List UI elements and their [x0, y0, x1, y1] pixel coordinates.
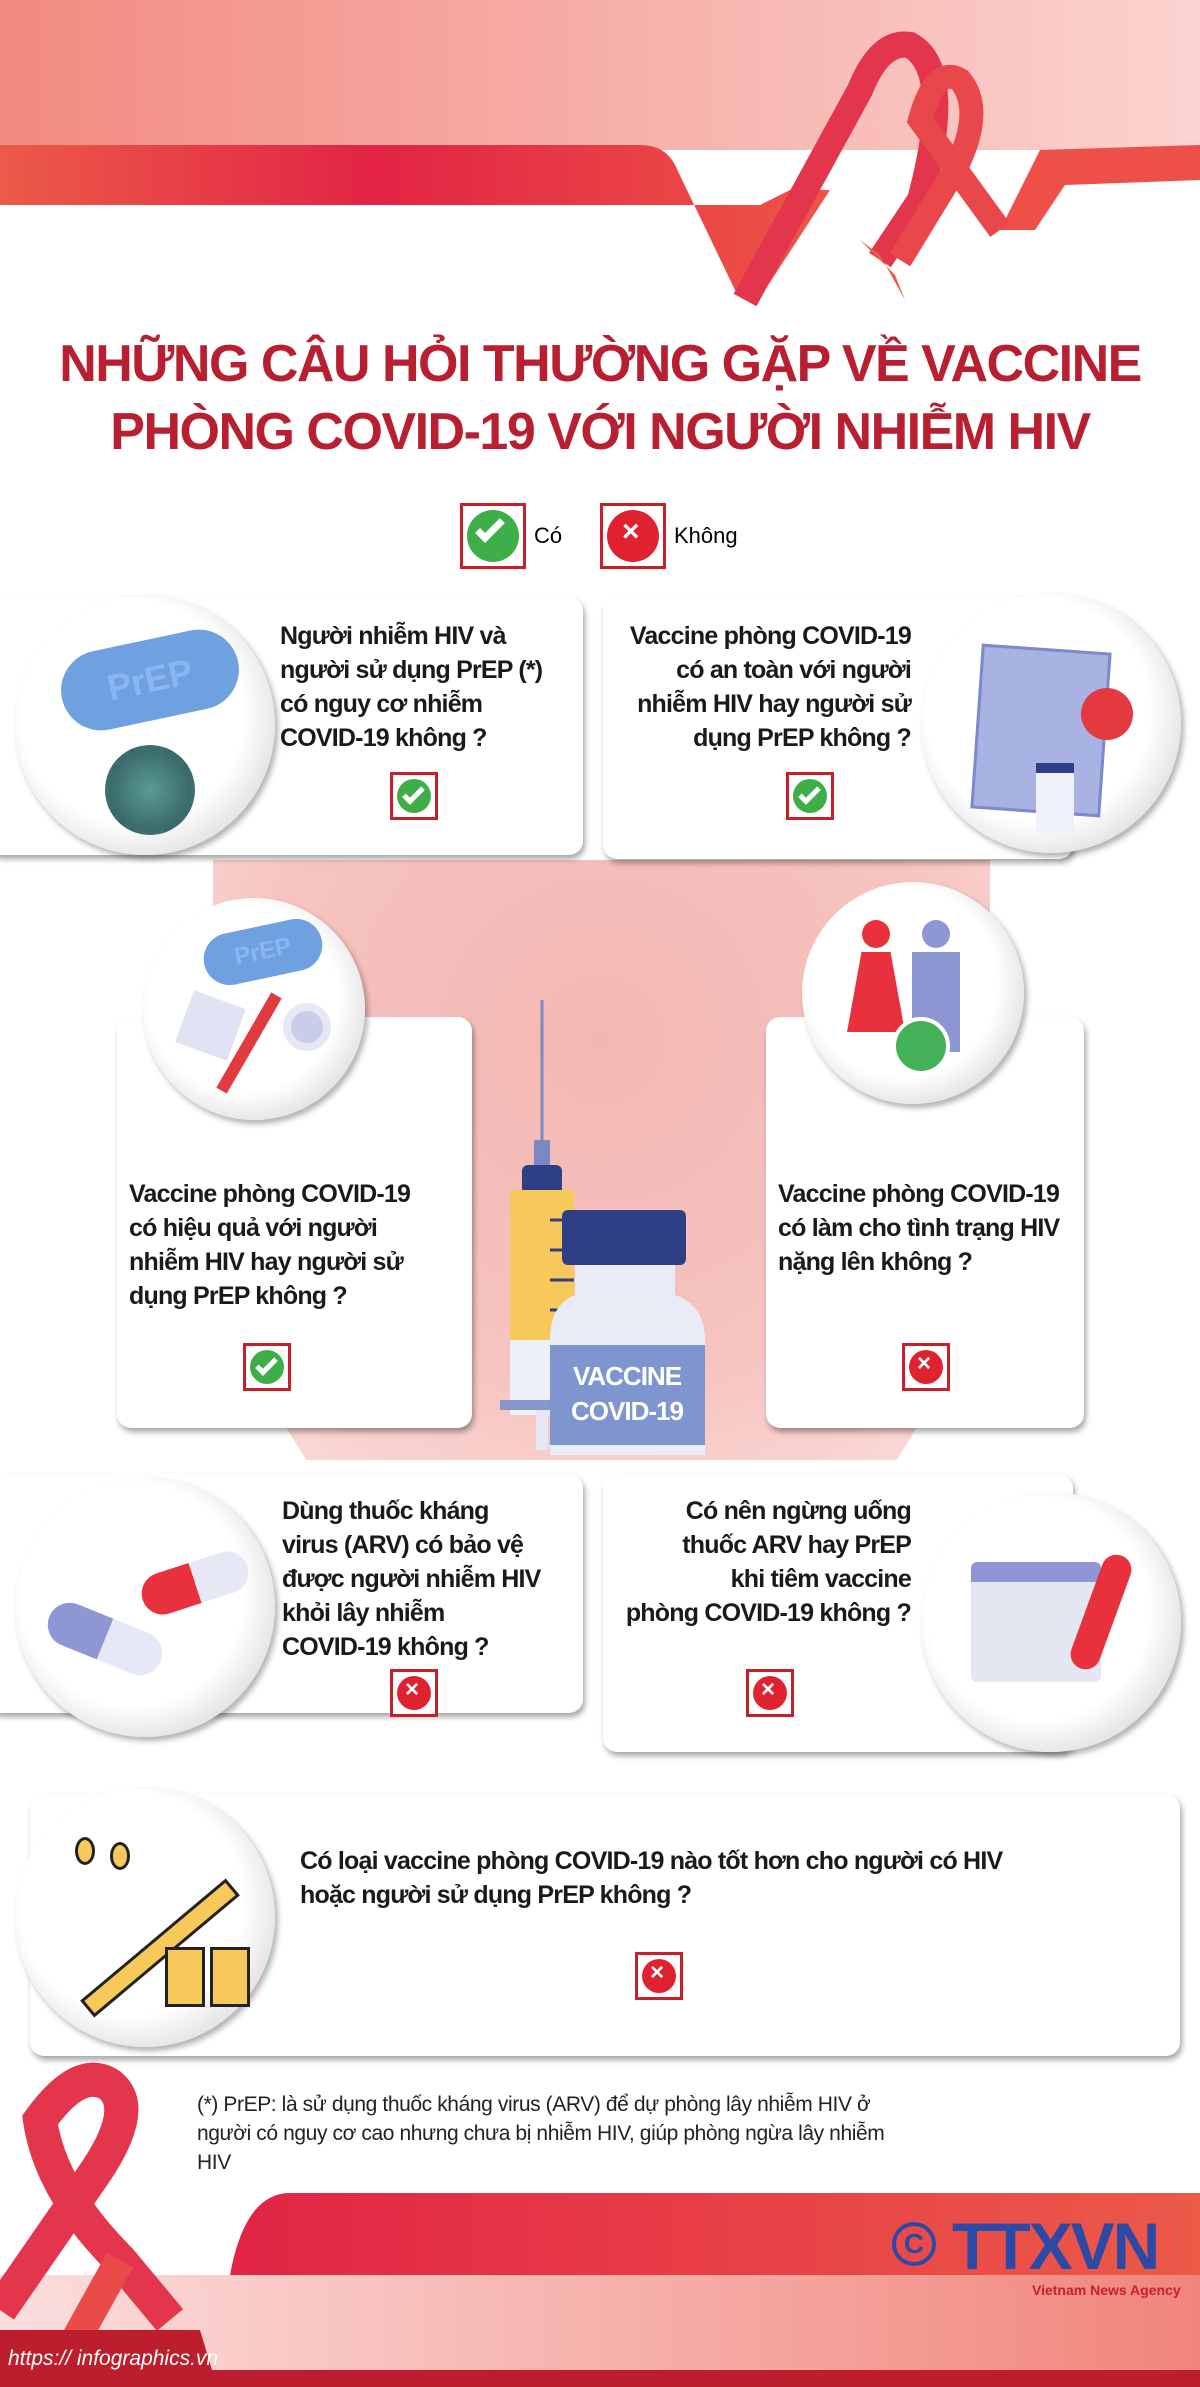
question 6: phòng COVID-19 không ?	[626, 1599, 911, 1627]
syringe and vaccine vial	[500, 1000, 705, 1455]
question 6: Có nên ngừng uống	[686, 1497, 911, 1525]
syringe and vaccine vial: VACCINE	[573, 1361, 682, 1391]
question 6: khi tiêm vaccine	[731, 1565, 911, 1593]
question 2: có an toàn với người	[676, 656, 911, 684]
footnote: HIV	[197, 2151, 231, 2174]
answer no: ×	[917, 1350, 931, 1377]
question 3: dụng PrEP không ?	[129, 1282, 347, 1310]
logo TTXVN: TTXVN	[952, 2209, 1158, 2283]
answer no	[635, 1952, 683, 2000]
legend	[460, 503, 738, 569]
question 6: thuốc ARV hay PrEP	[682, 1531, 911, 1559]
footnote: người có nguy cơ cao nhưng chưa bị nhiễm HIV, giúp phòng ngừa lây nhiễm	[197, 2122, 884, 2145]
question 2: dụng PrEP không ?	[693, 724, 911, 752]
question 1: Người nhiễm HIV và	[280, 622, 506, 650]
question 5: Dùng thuốc kháng	[282, 1497, 489, 1525]
footer ribbon and band	[0, 2062, 1200, 2387]
card 6	[603, 1474, 1073, 1752]
title: PHÒNG COVID-19 VỚI NGƯỜI NHIỄM HIV	[110, 403, 1090, 461]
icon: PrEP and syringe: PrEP	[232, 932, 294, 971]
syringe and vaccine vial: COVID-19	[571, 1396, 683, 1426]
question 3: có hiệu quả với người	[129, 1214, 377, 1242]
question 6	[626, 1497, 911, 1627]
header banner	[0, 0, 1200, 306]
answer no: ×	[405, 1676, 419, 1703]
question 4: có làm cho tình trạng HIV	[778, 1214, 1059, 1242]
icon: capsules	[15, 1477, 275, 1737]
question 7	[300, 1847, 1003, 1909]
card 7	[30, 1794, 1180, 2056]
question 1: người sử dụng PrEP (*)	[280, 656, 542, 684]
footnote	[197, 2092, 884, 2174]
card 5	[0, 1474, 583, 1713]
icon: calendar and thermometer	[921, 1492, 1181, 1752]
icon: PrEP pill and virus	[15, 595, 275, 855]
ribbon loops	[745, 45, 935, 300]
card 4	[766, 1017, 1084, 1428]
answer yes	[390, 772, 438, 820]
question 2	[630, 622, 912, 752]
question 1: có nguy cơ nhiễm	[280, 690, 482, 718]
question 1	[280, 622, 542, 752]
legend: Không	[674, 523, 738, 548]
answer no	[390, 1669, 438, 1717]
card 3	[117, 1017, 472, 1428]
question 5: COVID-19 không ?	[282, 1633, 489, 1661]
icon: clipboard and vaccine	[921, 593, 1181, 853]
card 2	[603, 597, 1073, 859]
question 3: Vaccine phòng COVID-19	[129, 1180, 410, 1208]
question 4: Vaccine phòng COVID-19	[778, 1180, 1059, 1208]
icon: PrEP and syringe	[143, 898, 365, 1120]
legend: Có	[534, 523, 562, 548]
question 4: nặng lên không ?	[778, 1248, 972, 1276]
question 2: Vaccine phòng COVID-19	[630, 622, 911, 650]
answer yes	[786, 772, 834, 820]
question 3	[129, 1180, 410, 1310]
question 5: khỏi lây nhiễm	[282, 1599, 444, 1627]
question 5: virus (ARV) có bảo vệ	[282, 1531, 523, 1559]
question 7: hoặc người sử dụng PrEP không ?	[300, 1881, 691, 1909]
title: NHỮNG CÂU HỎI THƯỜNG GẶP VỀ VACCINE	[59, 335, 1141, 393]
question 7: Có loại vaccine phòng COVID-19 nào tốt hơn cho người có HIV	[300, 1847, 1002, 1875]
question 4	[778, 1180, 1060, 1276]
logo TTXVN	[892, 2209, 1181, 2298]
question 5	[282, 1497, 542, 1661]
center background shape	[213, 860, 990, 1460]
icon: people and shield	[802, 882, 1024, 1104]
question 2: nhiễm HIV hay người sử	[637, 690, 911, 718]
answer no	[902, 1343, 950, 1391]
question 5: được người nhiễm HIV	[282, 1565, 541, 1593]
footnote: (*) PrEP: là sử dụng thuốc kháng virus (ARV) để dự phòng lây nhiễm HIV ở	[197, 2093, 870, 2116]
title	[59, 334, 1141, 461]
question 3: nhiễm HIV hay người sử	[129, 1248, 403, 1276]
legend: ×	[622, 515, 640, 548]
answer no: ×	[650, 1959, 664, 1986]
answer no: ×	[761, 1676, 775, 1703]
question 1: COVID-19 không ?	[280, 724, 487, 752]
answer no	[746, 1669, 794, 1717]
icon: syringe and vials	[15, 1787, 275, 2047]
answer yes	[243, 1343, 291, 1391]
icon: PrEP pill and virus: PrEP	[104, 651, 196, 709]
card 1	[0, 597, 583, 855]
logo TTXVN: Vietnam News Agency	[1032, 2282, 1181, 2298]
url: https:// infographics.vn	[8, 2347, 218, 2370]
logo TTXVN: C	[904, 2228, 924, 2259]
